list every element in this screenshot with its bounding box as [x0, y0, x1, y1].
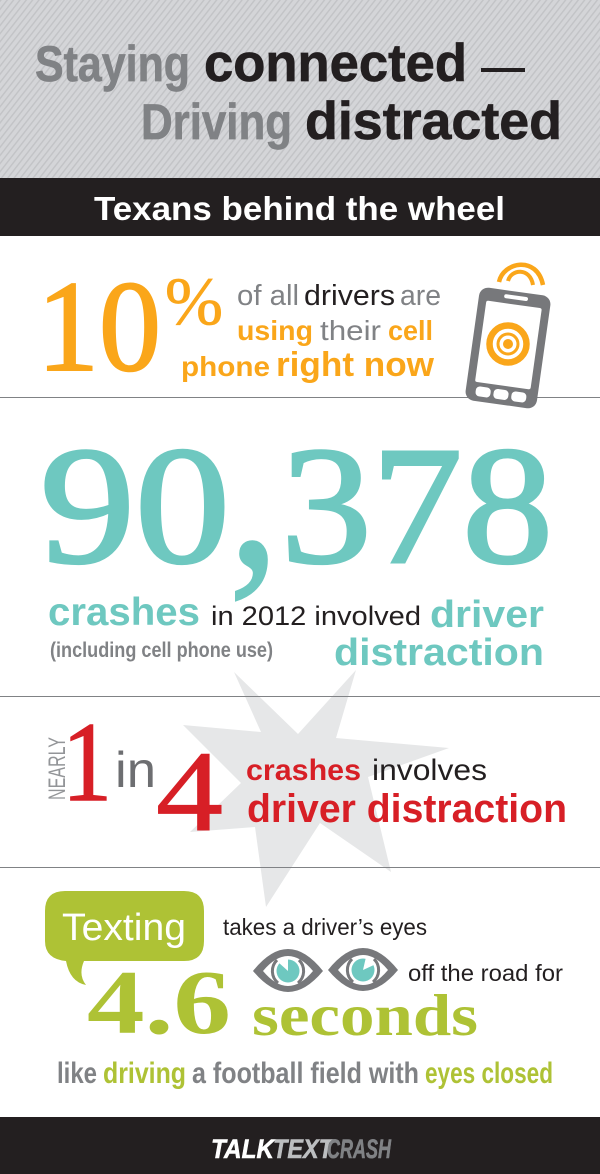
title: [35, 34, 562, 151]
text: like driving a football field with eyes closed: a football field with: [192, 1057, 419, 1090]
logo: talk text crash: CRASH: [327, 1134, 391, 1164]
divider lines: [0, 398, 600, 868]
title: Staying: [35, 36, 190, 92]
text: like driving a football field with eyes closed: driving: [103, 1057, 186, 1090]
text: like driving a football field with eyes closed: like: [57, 1057, 97, 1090]
star burst background: [183, 670, 449, 907]
big number 90,378: ,: [228, 360, 280, 615]
text: crashes involves driver distraction: crashes: [246, 754, 361, 787]
text: crashes in 2012 involved driver distraction: driver: [430, 594, 544, 636]
panel: 10 percent stat: [37, 255, 552, 409]
text: crashes in 2012 involved driver distraction: [48, 591, 544, 674]
text: crashes in 2012 involved driver distraction: crashes: [48, 591, 200, 634]
text: of all drivers are using their cell phone right now: right now: [276, 346, 435, 384]
subtitle banner: Texans behind the wheel: [94, 190, 505, 227]
title: Driving: [141, 94, 292, 150]
big figure: 1 in 4: 4: [156, 728, 223, 855]
text: of all drivers are using their cell phone right now: drivers: [304, 280, 395, 312]
text: of all drivers are using their cell phone right now: are: [400, 280, 441, 312]
panel: texting: [45, 891, 563, 1090]
text: crashes involves driver distraction: involves: [372, 754, 487, 787]
label: nearly: NEARLY: [44, 737, 71, 800]
big number 10%: [37, 255, 223, 399]
icon: smartphone with signal: [464, 265, 552, 409]
header panel: [0, 0, 600, 178]
text: of all drivers are using their cell phone right now: [181, 280, 441, 384]
text: of all drivers are using their cell phone right now: phone: [181, 351, 270, 382]
logo: talk text crash: TALK: [211, 1134, 276, 1164]
title: connected: [204, 34, 467, 93]
text: crashes involves driver distraction: [246, 754, 567, 831]
text: of all drivers are using their cell phone right now: using: [237, 315, 313, 346]
text: off the road for: off the road for: [408, 960, 563, 986]
text: like driving a football field with eyes closed: [57, 1057, 553, 1090]
text: crashes in 2012 involved driver distraction: distraction: [334, 632, 544, 674]
footer: [0, 1117, 600, 1174]
big figure: 1 in 4: in: [115, 742, 156, 798]
subtitle banner: [0, 178, 600, 236]
panel: 90,378 crashes: [40, 360, 553, 674]
logo: talk text crash: [211, 1134, 391, 1164]
text: of all drivers are using their cell phone right now: cell: [388, 315, 433, 346]
big number 10%: %: [165, 263, 223, 339]
text: crashes involves driver distraction: driver distraction: [247, 787, 567, 831]
big number 90,378: [40, 360, 553, 615]
big number 90,378: 90: [40, 413, 230, 599]
big figure: 4.6: 4.6: [87, 952, 231, 1053]
big number 10%: 10: [37, 255, 161, 399]
icon: eyes: [253, 948, 398, 992]
title: distracted: [305, 92, 562, 151]
speech bubble: texting: [45, 891, 204, 985]
text: of all drivers are using their cell phone right now: of all: [237, 280, 299, 312]
text: crashes in 2012 involved driver distraction: in 2012 involved: [211, 601, 421, 631]
big figure: 1 in 4: 1: [62, 700, 112, 825]
panel: nearly 1 in 4: [44, 700, 567, 855]
big number 90,378: 378: [281, 413, 553, 599]
logo: talk text crash: TEXT: [273, 1134, 335, 1164]
text: of all drivers are using their cell phone right now: their: [320, 315, 381, 346]
text: takes a driver's eyes: takes a driver’s eyes: [223, 914, 427, 940]
note: including cell phone use: (including cell phone use): [50, 639, 273, 662]
big figure: 1 in 4: [62, 700, 223, 855]
text: seconds: seconds: [252, 982, 478, 1048]
text: like driving a football field with eyes closed: eyes closed: [425, 1057, 553, 1090]
speech bubble: texting: Texting: [62, 907, 186, 949]
